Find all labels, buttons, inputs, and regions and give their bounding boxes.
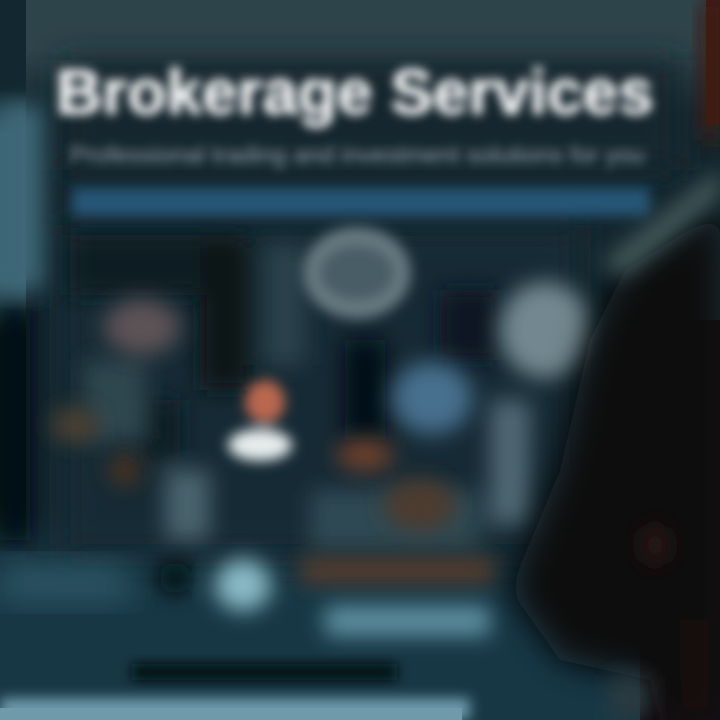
top band <box>60 60 680 555</box>
circle: left badge <box>104 299 180 355</box>
foreground figure at right <box>510 210 720 720</box>
spot on foreground figure <box>639 525 671 565</box>
lower right grey patch <box>610 675 650 720</box>
brown accents <box>51 407 495 582</box>
light blue desk object <box>159 559 490 636</box>
subtitle: Professional trading and investment solutions for you <box>70 142 645 169</box>
person: orange and white figure <box>228 380 292 461</box>
top right dark red glow <box>700 0 720 140</box>
pale diagonal streak <box>600 170 720 275</box>
dark strip <box>132 664 397 680</box>
foreground figure base <box>640 320 720 720</box>
person: blue figure <box>392 362 472 434</box>
lower desk highlight <box>0 565 130 600</box>
blue banner <box>72 188 650 216</box>
top right dark red element <box>706 0 720 125</box>
left wall panel <box>0 105 44 540</box>
circle: top centre badge <box>303 227 411 319</box>
left edge wash <box>0 0 26 560</box>
bottom light strip glow <box>0 698 470 720</box>
dark columns behind the icons <box>70 235 530 550</box>
circle: right badge <box>499 282 591 378</box>
bottom light strip <box>0 708 462 720</box>
title: Brokerage Services <box>56 56 654 128</box>
